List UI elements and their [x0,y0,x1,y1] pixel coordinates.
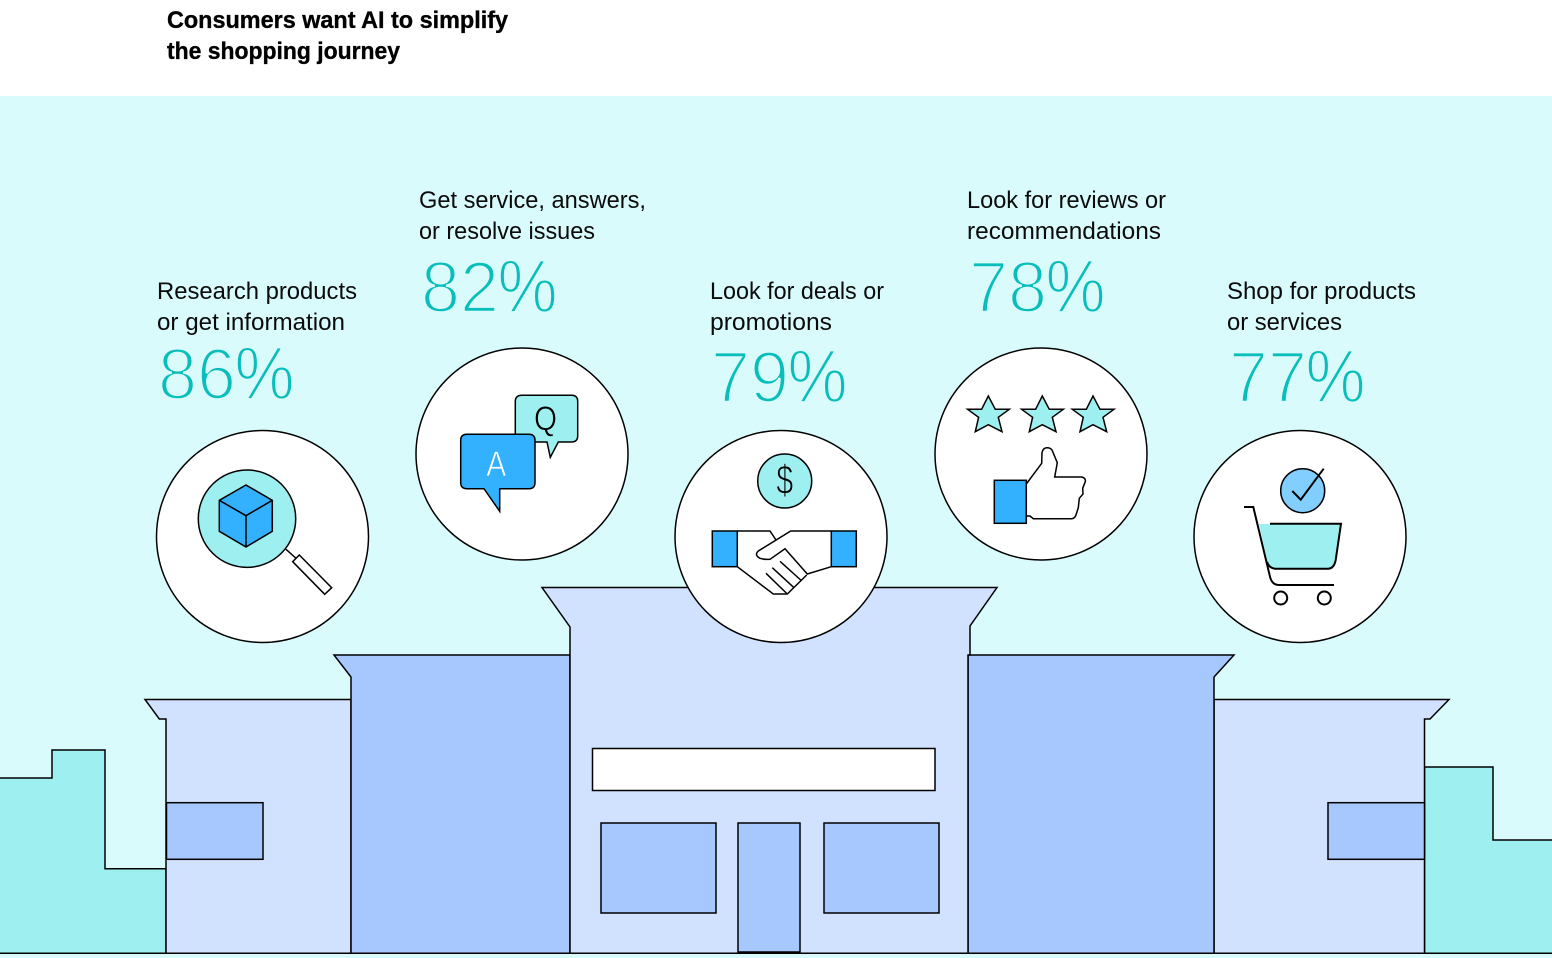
storefront illustration [0,588,1552,953]
percentage [969,244,1106,328]
percentage: % [498,244,558,328]
central building [542,588,997,953]
left wing window [166,803,263,859]
label: recommendations [967,218,1161,245]
store sign [592,748,935,790]
panel: deals and promotions [675,278,887,642]
percentage: % [1046,244,1106,328]
icon: stars and thumbs up [935,348,1147,560]
label: Get service, answers, [419,187,646,214]
percentage [421,244,558,328]
label: Look for reviews or [967,187,1166,214]
label [157,278,357,336]
percentage: 77 [1229,338,1307,418]
percentage: 79 [711,338,789,418]
label: promotions [710,309,832,336]
panel: reviews and recommendations [935,187,1166,560]
left background skyline [0,750,166,953]
label [419,187,646,245]
right tower [968,655,1234,953]
label: Shop for products [1227,278,1416,305]
store door [738,823,800,952]
label [1227,278,1416,336]
percentage: 78 [969,248,1047,328]
label: or resolve issues [419,218,595,245]
title: Consumers want AI to simplify [167,7,509,34]
label: Research products [157,278,357,305]
panel: shop for products [1194,278,1416,642]
percentage: 86 [158,335,236,415]
percentage: % [788,334,848,418]
percentage [1229,334,1366,418]
title: the shopping journey [167,38,401,65]
icon: magnifying glass over box [156,430,368,642]
panel: service and answers [416,187,646,560]
right wing of building [1214,700,1449,953]
left tower [334,655,570,953]
left wing of building [145,700,351,953]
label [710,278,884,336]
icon: question and answer bubbles [416,348,628,560]
label: Look for deals or [710,278,884,305]
icon: handshake with dollar coin: $ [776,456,793,503]
right wing window [1328,803,1424,859]
percentage: 82 [421,248,499,328]
left store window [601,823,716,913]
label [967,187,1166,245]
percentage: % [1306,334,1366,418]
percentage [711,334,848,418]
icon: shopping cart with check mark [1194,430,1406,642]
panel: research products [156,278,368,642]
icon: question and answer bubbles: A [486,445,507,484]
right store window [824,823,939,913]
title [167,7,509,65]
right background skyline [1424,767,1552,953]
label: or services [1227,309,1342,336]
icon: handshake with dollar coin [675,430,887,642]
percentage: % [234,331,294,415]
label: or get information [157,309,345,336]
icon: question and answer bubbles: Q [534,400,557,438]
percentage [158,331,294,415]
